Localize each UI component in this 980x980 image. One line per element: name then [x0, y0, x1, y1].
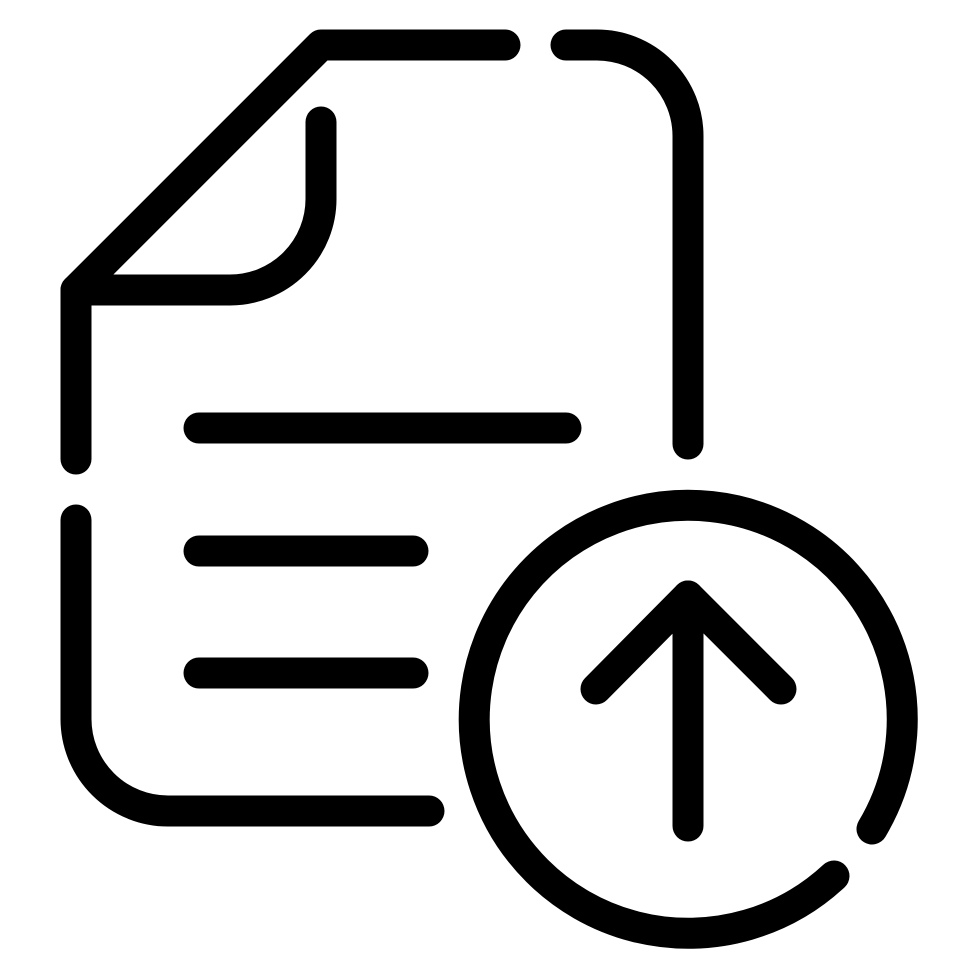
document outline: top-right corner and right side — [566, 45, 688, 444]
document outline: top-left and fold edge — [76, 45, 505, 459]
page fold — [76, 122, 321, 290]
text line 1 — [199, 412, 566, 444]
document outline: bottom-left corner — [76, 520, 429, 811]
upload arrow — [596, 596, 781, 826]
text line 2 — [199, 536, 413, 566]
upload circle — [474, 505, 902, 933]
text line 3 — [199, 658, 413, 688]
